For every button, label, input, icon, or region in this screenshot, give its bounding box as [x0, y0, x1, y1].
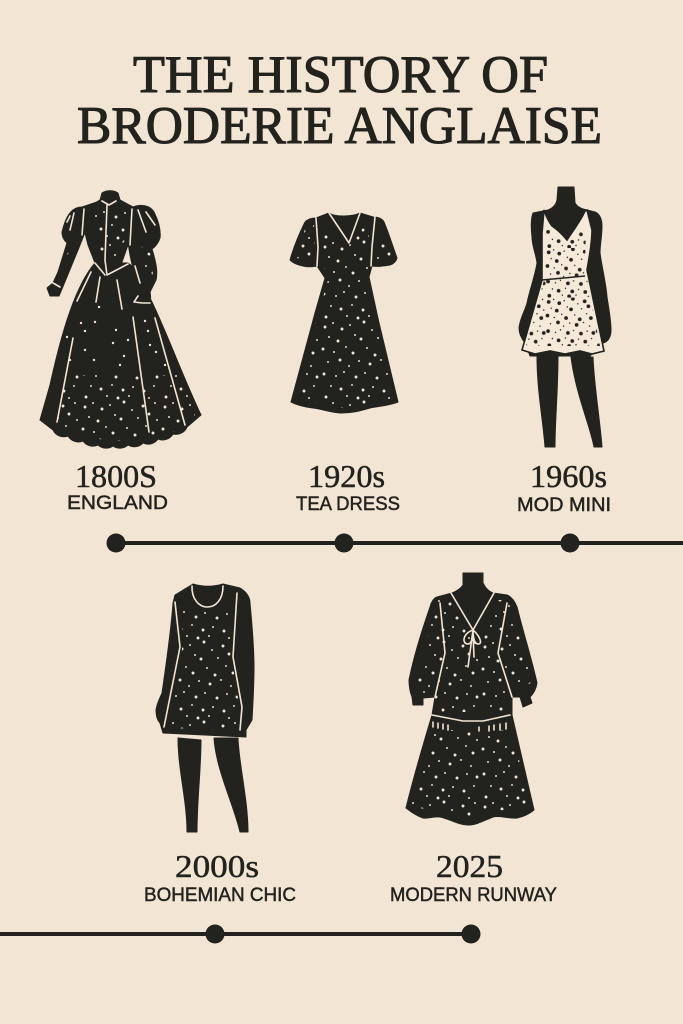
year label: 1800s England — [67, 458, 168, 514]
year label: 2000s bohemian chic — [144, 848, 296, 906]
year label: 1920s tea dress: TEA DRESS — [296, 494, 400, 515]
year label: 1960s mod mini: MOD MINI — [517, 495, 611, 516]
year label: 1800s England: 1800S — [75, 458, 157, 494]
year label: 2000s bohemian chic: BOHEMIAN CHIC — [144, 885, 296, 906]
year label: 1920s tea dress: 1920s — [308, 458, 385, 494]
year label: 2000s bohemian chic: 2000s — [175, 848, 259, 884]
title: BRODERIE ANGLAISE — [77, 97, 602, 155]
timeline: upper — [106, 534, 683, 552]
year label: 1920s tea dress — [296, 458, 400, 515]
dress: 1920s tea dress — [290, 213, 398, 413]
year label: 1960s mod mini — [517, 458, 611, 516]
dress: 1960s mod mini — [519, 187, 611, 447]
year label: 2025 modern runway: 2025 — [436, 848, 503, 884]
dress: 1800s England — [40, 191, 201, 448]
year label: 2025 modern runway — [390, 848, 557, 906]
timeline: lower — [0, 924, 480, 944]
year label: 1960s mod mini: 1960s — [530, 458, 607, 494]
title: THE HISTORY OF — [133, 46, 548, 104]
dress: 2000s bohemian chic — [156, 584, 254, 832]
title — [77, 46, 602, 155]
year label: 1800s England: ENGLAND — [67, 493, 168, 514]
dress: 2025 modern runway — [406, 573, 537, 825]
year label: 2025 modern runway: MODERN RUNWAY — [390, 885, 557, 906]
